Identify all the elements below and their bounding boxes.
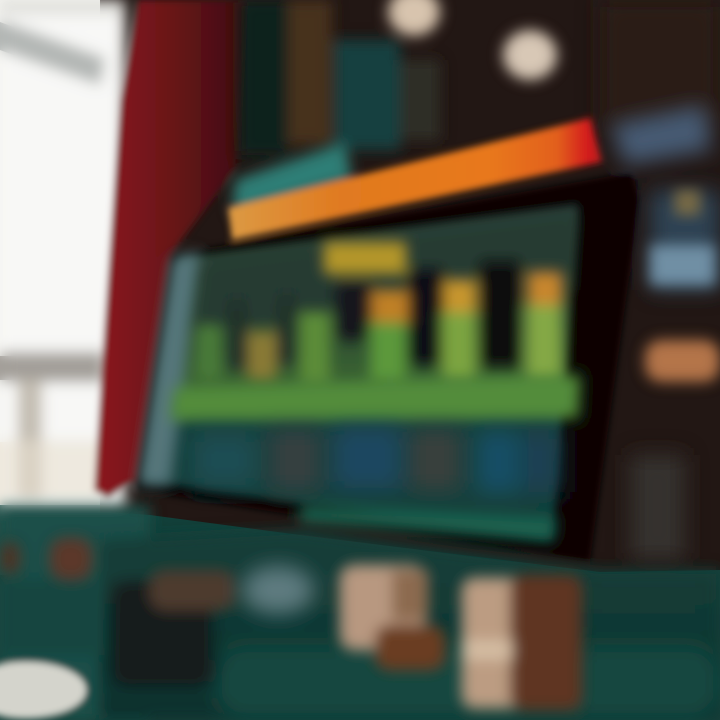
lower colored columns <box>195 428 558 492</box>
ceiling lights <box>388 0 557 80</box>
dark cup <box>112 570 235 687</box>
teal panel behind orange bar <box>232 142 352 215</box>
window on the left <box>0 0 125 510</box>
monitor body <box>135 172 640 562</box>
light blue reflection on table <box>242 566 314 614</box>
centre cup stack <box>340 565 445 670</box>
left bezel highlight <box>138 252 200 485</box>
table <box>0 505 720 720</box>
display monitor <box>135 172 640 562</box>
screen <box>145 205 578 540</box>
right cup stack <box>462 575 582 710</box>
chart columns <box>197 242 562 384</box>
right side blue screens and orange lamp <box>610 105 720 382</box>
white plate <box>0 662 86 718</box>
dark wall panels behind the display <box>240 0 440 155</box>
red curtain <box>94 0 245 498</box>
upper chart dark zone <box>195 215 575 330</box>
background: dark room <box>600 0 720 560</box>
orange and red banner <box>228 118 602 240</box>
small brown cups on the left <box>0 538 92 580</box>
bottom green strip <box>300 505 555 540</box>
green chart band <box>170 375 580 420</box>
